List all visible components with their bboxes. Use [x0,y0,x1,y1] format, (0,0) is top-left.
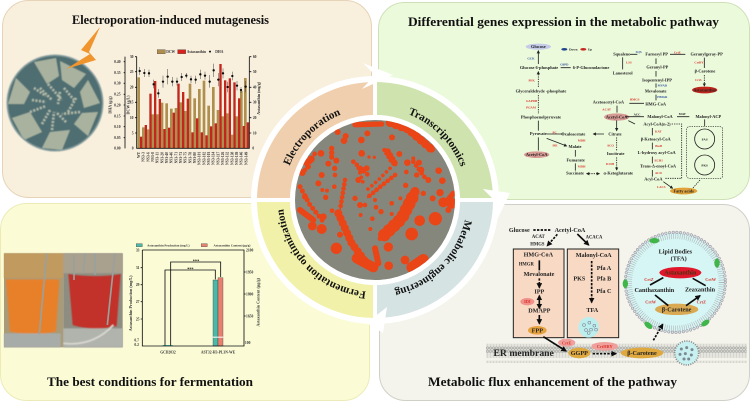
pathway metabolites: PKS [701,163,708,167]
pathway enzymes: LSS [626,61,632,65]
axis labels: 15 [130,101,134,105]
pathway enzymes: PGAM [526,106,536,110]
sector: transcriptomics: Transcriptomics [410,108,466,166]
chart axes and labels: 27 [136,300,140,304]
top of pathway: glucose to acetyl-CoA: Acetyl-CoA [555,228,586,234]
pathway metabolites: Oxaloacetate [561,131,585,136]
pathway enzymes: MDH [578,165,586,169]
top of pathway: glucose to acetyl-CoA: Glucose [509,228,530,234]
pathway metabolites: Glucose [531,44,546,49]
bar chart: astaxanthin production and content [128,244,260,354]
heading: electroporation-induced mutagenesis: Electroporation-induced mutagenesis [72,12,269,27]
pathway enzymes: KAT [655,129,663,133]
pathway metabolites: β-Carotene [695,69,715,74]
mevalonate pathway box: FPP [532,328,543,334]
axis labels: NS3-78 [188,152,192,163]
pathway metabolites: Acetyl-CoA [606,114,628,119]
heading: best conditions for fermentation: The best conditions for fermentation [47,374,254,389]
pathway metabolites: Geranyl-PP [646,65,669,70]
pathway enzymes: MDH [578,139,586,143]
panel: electroporation-induced mutagenesis [2,0,372,198]
lipid body: β-Carotene [662,307,692,313]
pathway enzymes: G6PD [560,62,569,66]
pathway enzymes: ME [552,143,558,147]
pathway enzymes: GCK [527,56,535,60]
pathway enzymes: BtoB [655,144,663,148]
top of pathway: glucose to acetyl-CoA: ACACA [586,236,603,241]
metabolic engineering diagram [486,228,747,365]
membrane enzymes and products: β-Carotene [627,351,657,357]
axis labels: 30 [130,55,134,59]
pathway enzymes: SQS [636,50,642,54]
pathway metabolites: Succinate [566,171,584,176]
axis labels: 25 [130,70,134,74]
axis labels [108,55,261,165]
axis labels: 0.20 [114,103,121,107]
chart axes and labels: GCD2032 [160,350,176,354]
axis labels: NS3-40 [165,152,169,163]
PKS pathway box: Pfa A [597,266,612,272]
mevalonate pathway box: HMGR [519,263,534,268]
axis labels: NS3-149 [244,152,248,165]
axis labels: DHA (g/g) [108,96,113,114]
axis labels: NS3-103 [207,152,211,165]
chart axes and labels: 1650 [246,314,253,318]
sector: electroporation: Electroporation [283,110,341,166]
axis labels: 0 [252,147,254,151]
axis labels: NS3-75 [184,152,188,163]
pathway enzymes: ACC [634,112,641,116]
photo: two fermenter vessels [4,253,123,347]
bars [163,278,223,346]
axis labels: NS3-46 [170,152,174,163]
axis labels: 10 [130,116,134,120]
pathway enzymes: HMGR [657,95,668,99]
axis labels: 0.05 [114,136,121,140]
chart axes and labels: 29 [136,283,140,287]
axis labels: NS3-126 [221,152,225,165]
colony streaks: solid cores [300,123,453,267]
chart legend [157,50,224,54]
pathway metabolites: L-hydroxy acyl-CoA [638,150,677,155]
chart axes and labels: Astaxanthin Content (µg/g) [255,277,260,327]
axis labels: 0.15 [114,114,121,118]
membrane enzymes and products: CrtHBY [597,344,613,349]
DHA points with error bars [138,64,247,98]
pathway metabolites: Acetyl-CoA [526,152,548,157]
PKS pathway box: Pfa C [597,289,611,295]
axis labels: NS3-146 [240,152,244,165]
pathway metabolites: Acyl-CoA(n-2) [643,122,671,127]
sector: metabolic engineering [377,202,493,318]
pathway metabolites: Phosphoenolpyruvate [521,114,561,119]
lipid body: CrtZ [644,277,654,282]
pathway enzymes: MAT [679,112,687,116]
pathway metabolites [516,44,723,193]
axis labels: NS3-117 [216,152,220,165]
chart axes and labels: 2100 [246,248,253,252]
arrowheads around the cycle [357,63,510,333]
PKS pathway box: PKS [573,277,586,283]
icon: streaked agar plate [7,55,103,151]
pathway metabolites: 6-P-Gluconolactone [573,65,609,70]
pathway metabolites: Geranylgeray-PP [691,52,723,57]
pathway enzymes: CrtBY [694,60,704,64]
axis labels: NS3-6 [146,152,150,162]
chart legend [136,244,250,248]
axis labels: NS3-11 [156,152,160,163]
panel: fermentation conditions [0,204,370,400]
pathway metabolites: Fatty acids [674,188,694,193]
pathway metabolites: Glucose 6-phosphate [520,65,558,70]
axis labels: 0.25 [114,93,121,97]
individual colonies [299,122,457,270]
pathway metabolites: Isopentenyl-IPP [642,77,672,82]
pathway enzymes: MVAD [658,84,668,88]
top of pathway: glucose to acetyl-CoA: HMGS [530,243,545,248]
pathway enzymes: ACO [607,143,614,147]
lipid body [623,232,725,332]
axis labels: NS3-139 [235,152,239,165]
lipid body: Lipid Bodies [659,249,693,255]
pathway metabolites: α-Ketoglutarate [604,171,633,176]
pathway metabolites: Acetoacetyl-CoA [593,100,625,105]
axis labels: Astaxanthin (mg/g) [256,81,261,115]
pathway arrows [538,51,723,188]
pathway enzymes: GAPDH [526,99,538,103]
pathway metabolites: Down [569,48,578,52]
panel: metabolic flux enhancement [380,204,750,400]
axis labels: NS3-102 [202,152,206,165]
bar chart: DCW, astaxanthin and DHA by strain [108,50,261,165]
PKS pathway box: TFA [586,308,599,314]
pathway metabolites: Squalene [613,52,630,57]
heading: metabolic flux enhancement: Metabolic flux enhancement of the pathway [428,374,678,389]
axis labels: 50 [253,70,257,74]
mevalonate pathway box: IPP [534,290,545,296]
significance brackets: *** [193,259,199,264]
axis labels: 0.40 [114,60,121,64]
axis labels: NS3-3 [142,152,146,162]
sector: transcriptomics [377,82,493,198]
lipid body: Canthaxanthin [634,288,675,294]
chart axes and labels: 1950 [246,270,253,274]
chart legend: Astaxanthin [187,50,206,54]
pathway enzymes: CrtS [695,78,702,82]
pathway metabolites: Lanosterol [613,70,633,75]
lipid body: (TFA) [671,256,687,263]
top of pathway: glucose to acetyl-CoA: ACAT [532,235,546,240]
axis labels: NS3-138 [230,152,234,165]
axis labels: 0.00 [114,147,121,151]
axis labels: 10 [253,131,257,135]
chart axes and labels: 0.7 [134,338,139,342]
metabolic pathway diagram [516,44,723,194]
axis labels: 0.10 [114,125,121,129]
chart legend: Astaxanthin Content (µg/g) [214,244,250,248]
pathway metabolites: FAS [702,137,708,141]
chart axes and labels: AST32-H3-PL3N-WE [201,350,236,354]
pathway metabolites: Pyruvate [530,131,547,136]
significance brackets: *** [187,267,194,272]
axis labels: NS3-132 [226,152,230,165]
axis labels: WT [137,151,141,158]
chart axes and labels: 1800 [246,292,253,296]
chart axes and labels: 31 [136,266,140,270]
pathway metabolites: Glyceraldehyde -phosphate [516,89,566,94]
axis labels: NS3-101 [198,152,202,165]
pathway metabolites: Acyl-CoA [644,176,663,181]
pathway metabolites: Up [588,48,592,52]
pathway enzymes: CrtE [674,50,681,54]
icon: lightning bolt [66,27,100,69]
pathway enzymes: HMGS [630,98,640,102]
pathway metabolites: Farnesyl PP [645,52,668,57]
pathway metabolites: HMG-CoA [645,101,667,106]
chart axes and labels [128,248,260,354]
pathway enzymes: LACS [657,185,666,189]
mevalonate pathway box: IDI [524,299,531,304]
mevalonate pathway box: HMG-CoA [524,253,554,259]
ER membrane: ER membrane [493,348,555,359]
axis labels: NS3-71 [174,152,178,163]
sector: metabolic engineering: Metabolic engineering [394,220,472,296]
pathway enzymes: ICDH [606,162,615,166]
axis labels: 0.35 [114,71,121,75]
PKS pathway box [567,249,619,338]
axis labels: 30 [253,101,257,105]
chart legend: DCW [166,50,175,54]
tan DCW bars [137,77,247,148]
membrane enzymes and products: CrtE [562,340,571,345]
pathway metabolites: Malate [569,144,582,149]
pathway enzymes: PC [553,130,557,134]
chart legend: DHA [215,50,224,54]
mevalonate pathway box: Mevalonate [524,272,555,278]
central circular workflow [251,63,510,333]
colony streaks: beaded edges [300,123,432,263]
sector: electroporation [257,82,373,198]
pathway metabolites: Trans-Δ-enoyl-CoA [640,163,677,168]
chart axes and labels: 100 [245,341,251,345]
axis labels: 60 [253,55,257,59]
pathway enzymes: ACD [655,171,662,175]
pathway enzymes: PFK [529,78,535,82]
red astaxanthin bars [140,64,249,148]
pathway metabolites: Malonyl-ACP [695,114,722,119]
axis labels: 20 [253,116,257,120]
chart axes and labels: 0.2 [134,343,139,347]
membrane enzymes and products [543,324,699,365]
chart axes and labels: 25 [136,317,140,321]
lipid body: Zeaxanthin [685,288,716,294]
axis labels: NS3-8 [151,152,155,162]
lipid body: CrtZ [697,299,706,304]
chart axes and labels: 33 [136,248,140,252]
PKS pathway box: Malonyl-CoA [576,253,612,259]
chart axes [124,57,251,148]
axis labels: 0.30 [114,82,121,86]
mevalonate pathway box: DMAPP [528,308,551,314]
axis labels: NS3-73 [179,152,183,163]
pathway metabolites: Mevalonate [645,88,667,93]
mevalonate pathway box [513,249,564,338]
axis labels: 5 [132,131,134,135]
top of pathway: glucose to acetyl-CoA [509,228,603,248]
pathway metabolites: β-Ketoacyl-CoA [641,136,671,141]
pathway ovals [524,44,717,194]
pathway enzymes [526,50,704,189]
axis labels: DCW (g/L) [126,95,131,115]
axis labels: 40 [253,86,257,90]
chart axes and labels: Astaxanthin Production (mg/L) [128,275,133,331]
axis labels: 0 [132,147,134,151]
pathway metabolites: Malonyl-CoA [647,114,673,119]
axis labels: NS3-80 [193,152,197,163]
membrane enzymes and products: GGPP [571,351,588,357]
chart legend: Astaxanthin Production (mg/L) [147,244,190,248]
heading: differential genes expression: Differential genes expression in the metabolic pathway [408,14,719,29]
lipid body: Astaxanthin [664,271,697,277]
PKS pathway box: Pfa B [597,277,611,283]
photo: petri dish with orange colonies [290,115,460,285]
pathway metabolites: Astaxanthin [693,87,717,92]
pathway enzymes: ECH1 [654,158,663,162]
significance brackets [165,259,221,345]
axis labels: NS3-114 [212,152,216,165]
sector: fermentation optimization [257,202,373,318]
axis labels: 20 [130,86,134,90]
sector: fermentation optimization: Fermentation optimization [278,209,366,299]
pathway metabolites: Citrate [608,131,622,136]
panel: differential gene expression [378,2,750,200]
pathway enzymes: ACAT [602,107,612,111]
pathway metabolites: Fumarate [567,157,585,162]
axis labels: NS3-20 [160,152,164,163]
ER membrane [486,344,747,363]
lipid body: CrtW [705,277,717,282]
lipid body: CrtW [645,300,657,305]
pathway metabolites: Isocitrate [607,151,625,156]
